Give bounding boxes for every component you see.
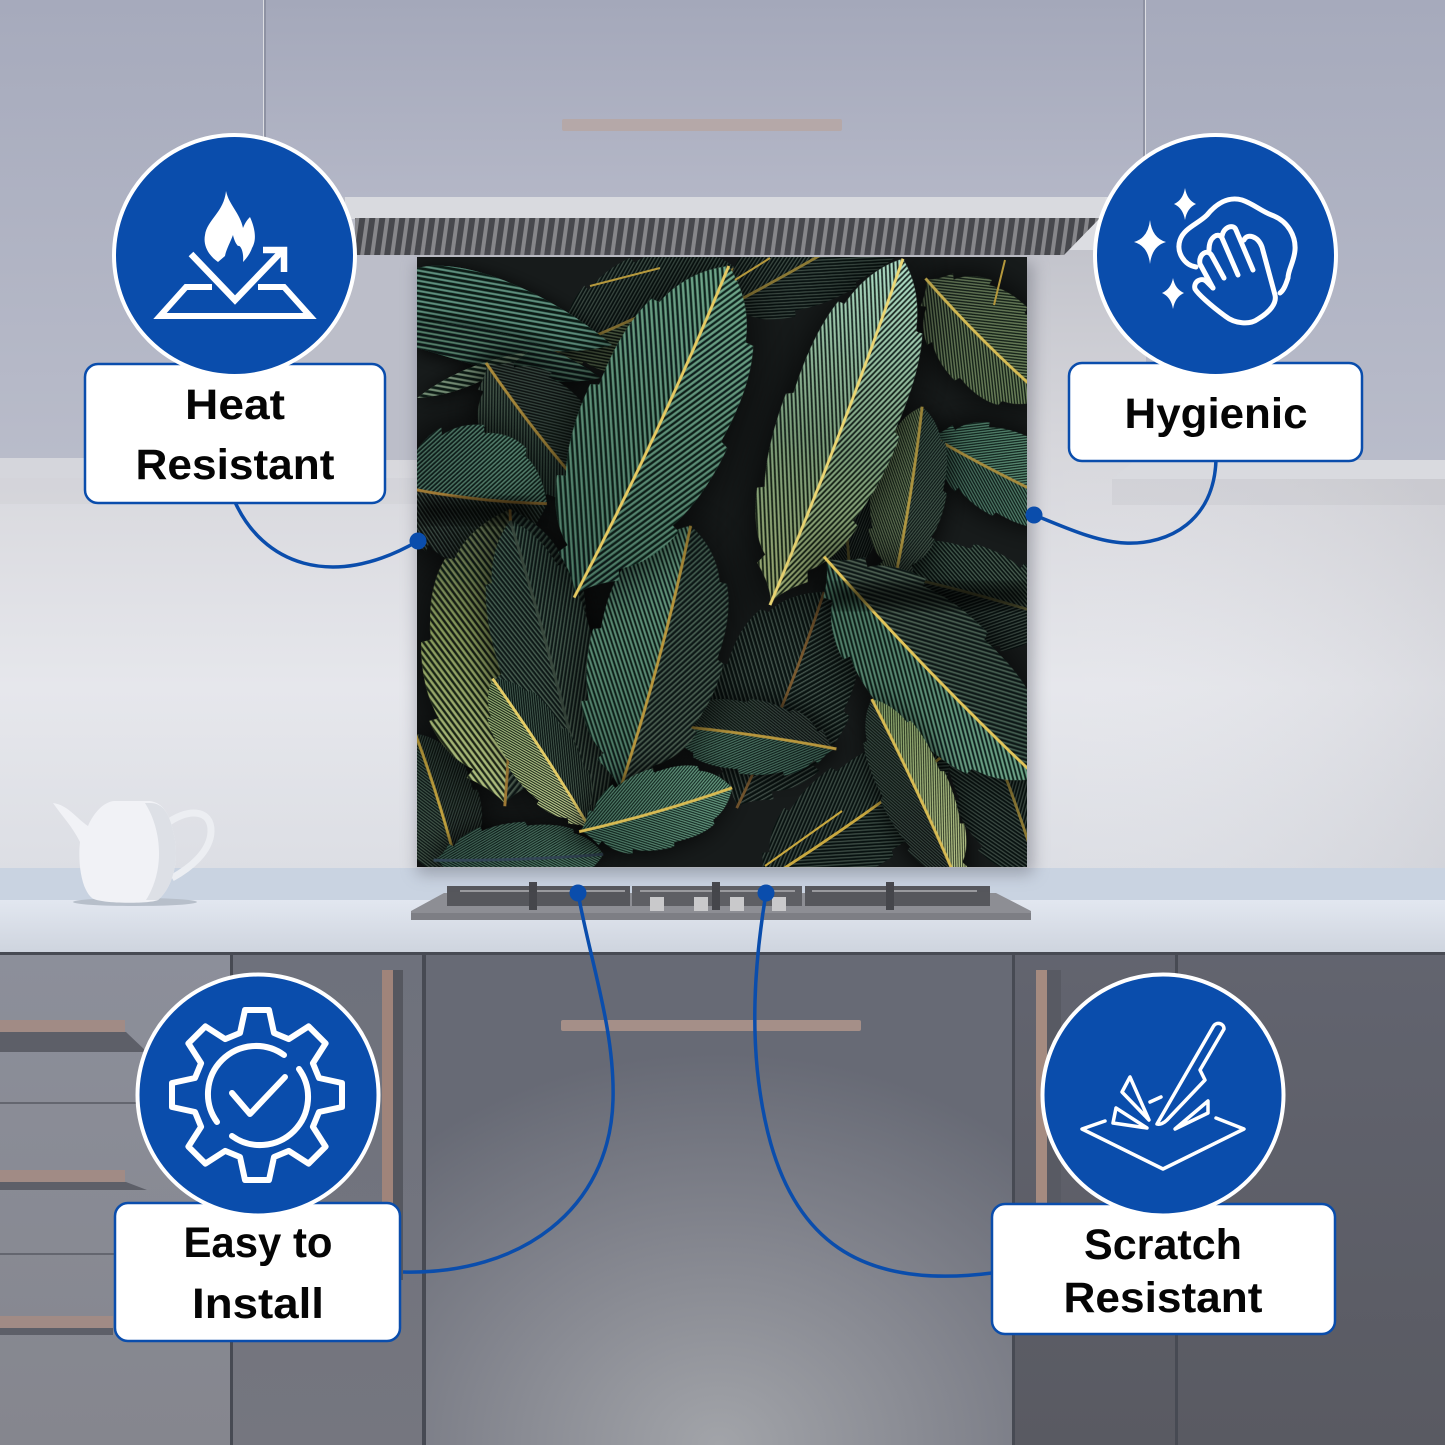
label box: easy to install <box>115 1203 400 1341</box>
feather: right middle teal <box>939 419 1027 528</box>
background feather: dim right <box>878 541 1027 652</box>
background feather: top olive <box>554 257 734 371</box>
background feather: dark lower right <box>949 764 1027 867</box>
feather: centre lower <box>556 525 752 794</box>
teapot <box>53 801 211 906</box>
feather: bottom centre teal <box>568 749 743 871</box>
gas hob <box>411 882 1031 920</box>
label box: heat resistant <box>85 364 385 503</box>
label box: scratch resistant <box>992 1204 1335 1334</box>
badge: scratch resistant icon <box>1042 974 1284 1216</box>
feather: light olive lower left <box>488 678 594 826</box>
badge: hygienic icon <box>1095 135 1336 376</box>
label text: resistant: Resistant <box>1064 1274 1262 1322</box>
background feather: dim upper middle <box>829 500 874 560</box>
connector: scratch resistant <box>755 884 992 1276</box>
feather: upper centre right <box>749 257 950 631</box>
callout: heat resistant <box>85 135 426 567</box>
callout: hygienic <box>1026 135 1362 543</box>
feather: upper left olive band <box>417 352 528 398</box>
feather: left teal <box>417 400 550 559</box>
feather: right middle dark olive <box>857 401 959 591</box>
background feather: dark centre <box>712 592 857 809</box>
feather: upper left teal band <box>417 322 600 382</box>
callout: scratch resistant <box>755 884 1335 1334</box>
feather: right top olive <box>920 270 1027 406</box>
feather: bottom right light green <box>856 684 982 867</box>
feather: lower right <box>786 522 1027 806</box>
feather: long dark <box>464 512 612 864</box>
feather: top left teal <box>417 266 612 351</box>
fold shadows and gold accents <box>417 258 1030 866</box>
label text: install: Install <box>192 1280 324 1328</box>
badge: heat resistant icon <box>114 135 355 376</box>
label text: resistant: Resistant <box>136 441 334 489</box>
feather: left olive <box>418 508 596 808</box>
background feather: dark bottom centre <box>762 750 949 867</box>
label text: scratch: Scratch <box>1084 1221 1242 1269</box>
label box: hygienic <box>1069 363 1362 461</box>
feather: dark with gold spine <box>457 342 586 497</box>
connector: easy to install <box>403 884 613 1272</box>
feather: bottom teal fragment <box>423 818 604 867</box>
feather: large centre <box>522 257 772 628</box>
label text: heat: Heat <box>185 381 285 429</box>
badge: easy to install icon <box>138 974 378 1216</box>
panel shadow <box>417 262 1033 874</box>
callout: easy to install <box>115 884 613 1341</box>
label text: easy to: Easy to <box>184 1219 332 1267</box>
background feather: top right dark <box>732 257 895 320</box>
label text: hygienic: Hygienic <box>1124 390 1308 438</box>
connector: heat resistant <box>235 502 426 567</box>
panel: feather splashback artwork <box>417 257 1027 867</box>
feather: bottom left gold <box>417 734 484 867</box>
feather: dark gold fan <box>663 688 842 786</box>
connector: hygienic <box>1026 460 1216 543</box>
